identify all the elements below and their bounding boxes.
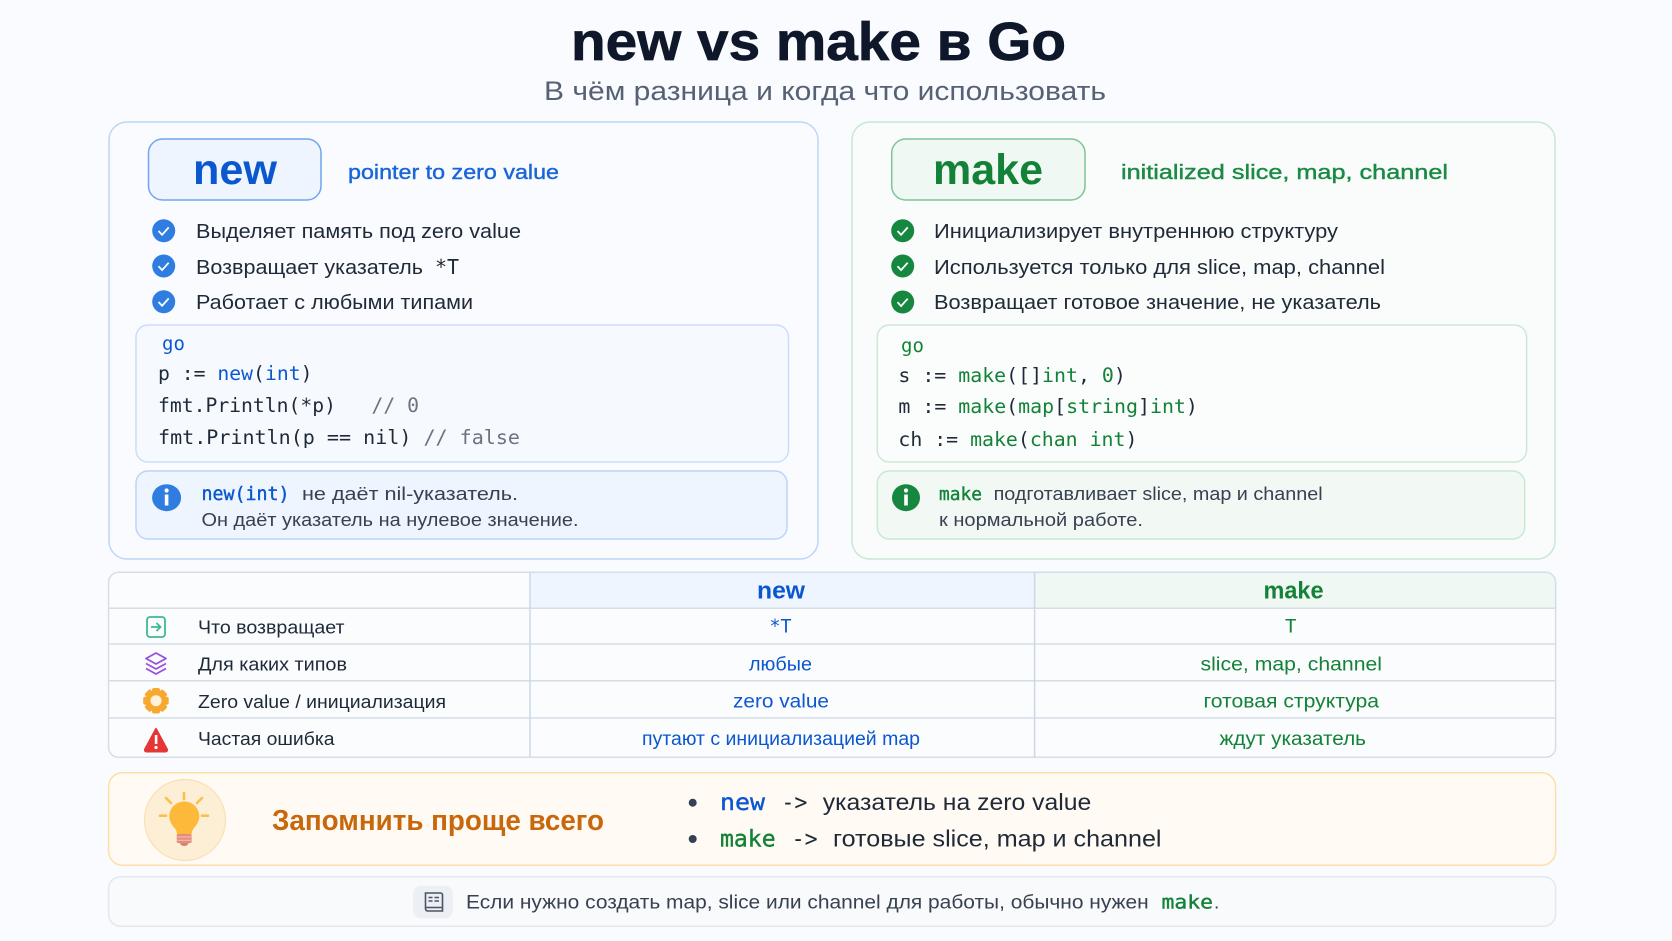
row: types: Для каких типов <box>198 654 347 674</box>
panel: new <box>109 122 818 559</box>
icon: layers <box>146 653 166 674</box>
row: types: любые <box>749 654 812 676</box>
tagline: new: pointer to zero value <box>348 162 559 184</box>
comparison table <box>109 572 1556 757</box>
row: returns <box>147 616 1296 638</box>
info note: make: make <box>939 484 982 505</box>
row: zero value <box>143 688 1379 714</box>
row: types: slice, map, channel <box>1200 654 1382 676</box>
bullet list: new: *T <box>435 255 459 279</box>
icon: info <box>152 484 181 511</box>
panel: make <box>852 122 1555 559</box>
row: zero value: готовая структура <box>1204 692 1379 712</box>
icon: warning <box>145 729 167 752</box>
takeaway list: -> <box>781 790 807 816</box>
code block: make: ch := make(chan int) <box>898 428 1137 451</box>
code block: new: go <box>162 333 185 355</box>
tagline: make: initialized slice, map, channel <box>1121 162 1448 184</box>
footer note: Если нужно создать map, slice или channel для работы, обычно нужен <box>466 892 1149 914</box>
bullet list: make: Возвращает готовое значение, не указатель <box>934 292 1381 314</box>
bullet list: make: Инициализирует внутреннюю структуру <box>934 221 1338 243</box>
info note: new: new(int) <box>202 484 290 505</box>
table header: new <box>530 572 1035 608</box>
badge: make <box>892 139 1085 200</box>
row: common mistake <box>145 729 1366 752</box>
footer note: . <box>1214 892 1219 914</box>
takeaway list: указатель на zero value <box>823 789 1091 815</box>
takeaway list: -> <box>792 826 818 852</box>
row: common mistake: ждут указатель <box>1220 729 1366 750</box>
takeaway list <box>689 789 1162 852</box>
code block: make <box>877 325 1527 462</box>
code block: new: fmt.Println(p == nil) // false <box>158 426 520 449</box>
table header: new: new <box>757 578 805 604</box>
callout: remember <box>109 773 1556 865</box>
callout heading: Запомнить проще всего <box>272 805 604 837</box>
icon: book <box>413 886 453 918</box>
row: returns: *T <box>770 616 792 638</box>
info note: new <box>136 471 787 539</box>
icon: light bulb <box>144 780 226 860</box>
icon: return arrow <box>147 617 165 637</box>
row: returns: T <box>1285 616 1296 638</box>
row: types <box>146 653 1382 676</box>
row: zero value: Zero value / инициализация <box>198 692 446 712</box>
icon: info <box>892 484 920 511</box>
footer note: make <box>1162 892 1213 914</box>
table header: make: make <box>1264 578 1324 604</box>
code block: make: m := make(map[string]int) <box>898 395 1198 418</box>
bullet list: new <box>152 219 521 314</box>
bullet list: new: Возвращает указатель <box>196 257 423 279</box>
takeaway list: new <box>720 790 765 816</box>
footer note <box>109 877 1556 926</box>
info note: make: подготавливает slice, map и channel <box>994 484 1323 504</box>
bullet list: make <box>891 219 1385 314</box>
row: common mistake: Частая ошибка <box>198 729 336 749</box>
info note: new: не даёт nil-указатель. <box>302 484 518 504</box>
badge: new: new <box>193 146 278 194</box>
row: returns: Что возвращает <box>198 618 344 638</box>
code block: new: p := new(int) <box>158 362 312 385</box>
code block: new <box>136 325 788 462</box>
takeaway list: готовые slice, map и channel <box>833 826 1162 852</box>
takeaway list: make <box>720 826 776 852</box>
subtitle: В чём разница и когда что использовать <box>544 76 1106 106</box>
bullet list: new: Работает с любыми типами <box>196 292 473 314</box>
info note: make <box>877 471 1525 539</box>
badge: new <box>148 139 321 200</box>
row: zero value: zero value <box>733 692 829 712</box>
badge: make: make <box>933 146 1043 194</box>
bullet list: new: Выделяет память под zero value <box>196 221 521 243</box>
row: common mistake: путают с инициализацией map <box>642 729 920 750</box>
info note: make: к нормальной работе. <box>939 510 1143 530</box>
title: new vs make в Go <box>571 12 1066 72</box>
icon: gear <box>143 688 169 714</box>
code block: make: s := make([]int, 0) <box>898 364 1126 387</box>
info note: new: Он даёт указатель на нулевое значение. <box>202 510 578 530</box>
code block: make: go <box>901 335 924 357</box>
table header: make <box>1035 572 1556 608</box>
bullet list: make: Используется только для slice, map, channel <box>934 257 1385 279</box>
code block: new: fmt.Println(*p) // 0 <box>158 394 419 417</box>
